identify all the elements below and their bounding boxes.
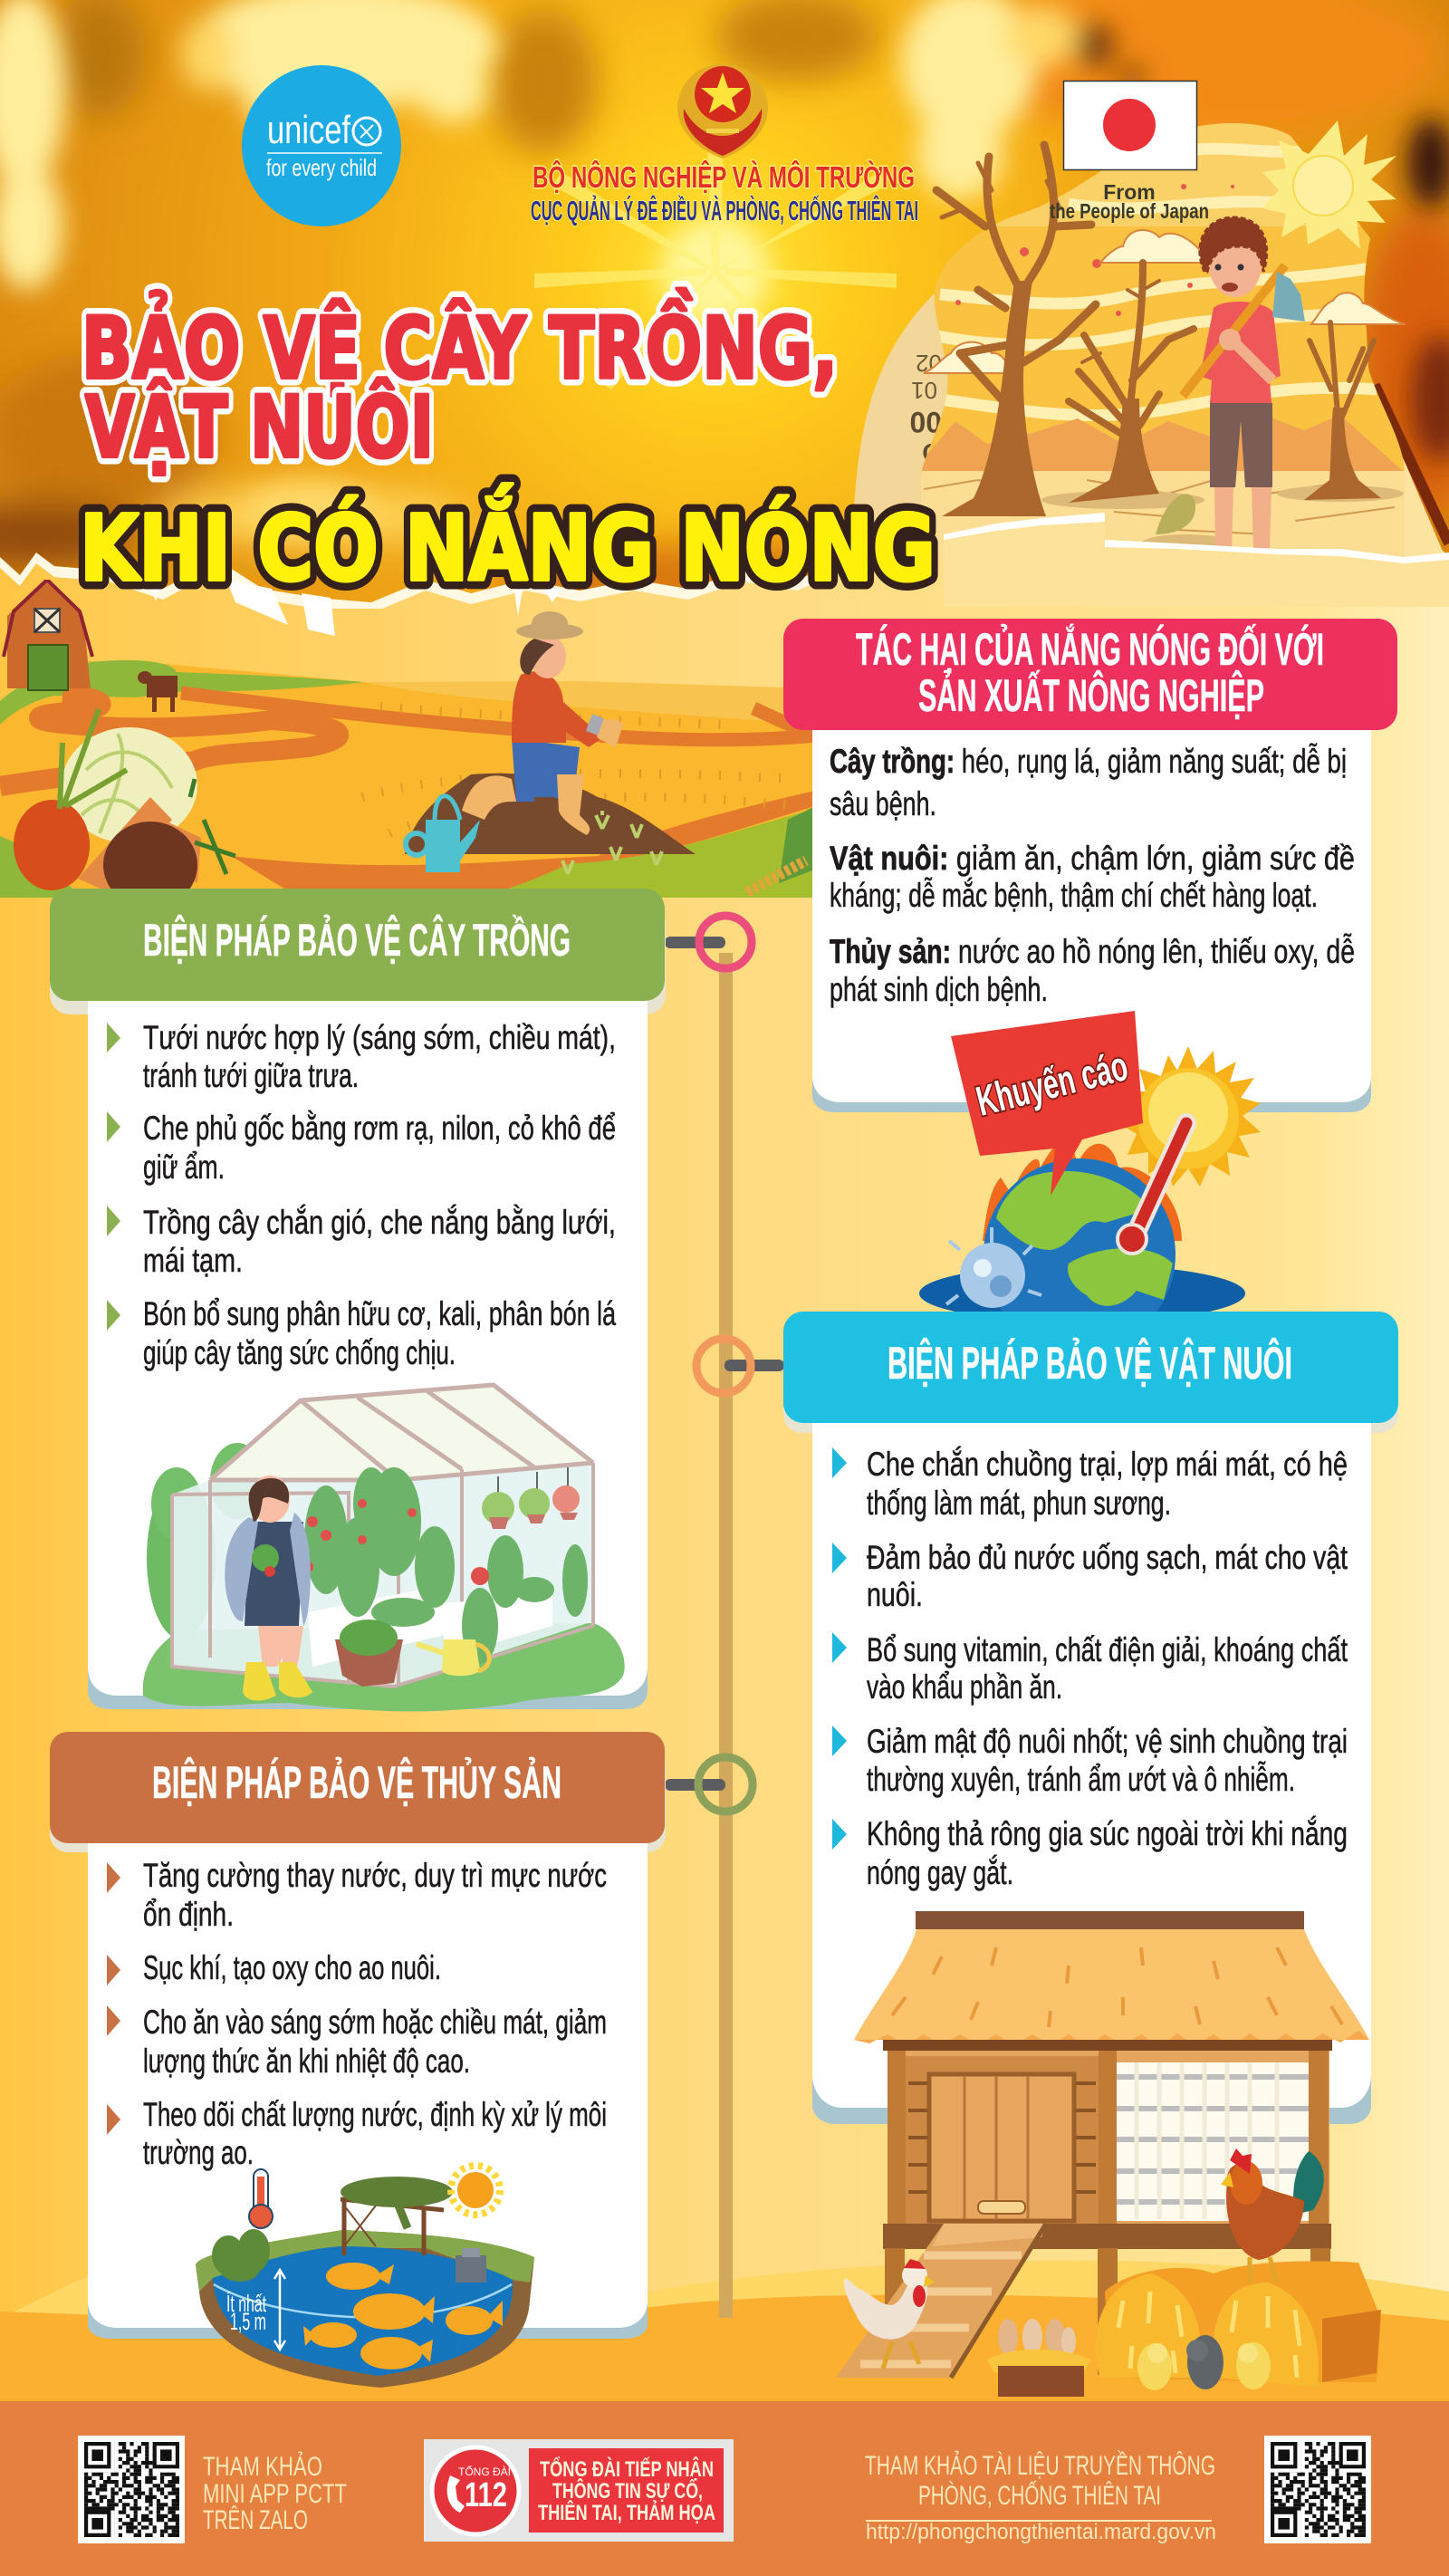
hen [844, 2259, 935, 2369]
hotline 112: THIÊN TAI, THẢM HỌA [538, 2499, 715, 2525]
QR code left [78, 2436, 185, 2543]
mini app text [203, 2451, 347, 2535]
heading [783, 619, 1397, 730]
farmer woman [462, 611, 623, 835]
barn [4, 580, 92, 690]
text list: Cho ăn vào sáng sớm hoặc chiều mát, giảm [143, 2004, 607, 2041]
text list: vào khẩu phần ăn. [867, 1668, 1062, 1706]
text list: Che phủ gốc bằng rơm rạ, nilon, cỏ khô để [143, 1110, 616, 1147]
heading [50, 1732, 665, 1843]
illustration: open book behind farmer: 00 [909, 406, 942, 438]
text list: ổn định. [143, 1896, 234, 1933]
farmer man [1183, 217, 1305, 549]
text list: giúp cây tăng sức chống chịu. [143, 1334, 456, 1371]
heading: BIỆN PHÁP BẢO VỆ CÂY TRỒNG [143, 915, 571, 966]
illustration: ground hills [0, 2260, 1449, 2409]
thermometer [1118, 1123, 1186, 1254]
bullet markers [832, 1447, 847, 1850]
chicks [1137, 2335, 1271, 2390]
sun [1118, 1046, 1261, 1187]
documents text: PHÒNG, CHỐNG THIÊN TAI [918, 2480, 1161, 2511]
text list: nóng gay gắt. [867, 1854, 1013, 1891]
ministry name: CỤC QUẢN LÝ ĐÊ ĐIỀU VÀ PHÒNG, CHỐNG THIÊN TAI [531, 194, 918, 226]
cow [138, 671, 178, 712]
text list: tránh tưới giữa trưa. [143, 1057, 359, 1094]
title: KHI CÓ NẮNG NÓNG [80, 484, 936, 601]
mini app text: TRÊN ZALO [203, 2505, 308, 2535]
illustration: chicken coop [836, 1911, 1381, 2397]
title: KHI CÓ NẮNG NÓNG [80, 484, 936, 601]
header background: fiery sky [0, 0, 1449, 616]
text list [143, 1019, 616, 1371]
pergola [341, 2177, 453, 2255]
text: phát sinh dịch bệnh. [830, 971, 1048, 1008]
heading: BIỆN PHÁP BẢO VỆ THỦY SẢN [152, 1756, 561, 1808]
torn paper edge [149, 513, 1449, 636]
warning sign [951, 1011, 1143, 1196]
logo: Vietnam national emblem [677, 63, 768, 159]
QR code right [1264, 2436, 1371, 2543]
ministry name: BỘ NÔNG NGHIỆP VÀ MÔI TRƯỜNG [533, 159, 915, 194]
documents text: THAM KHẢO TÀI LIỆU TRUYỀN THÔNG [865, 2450, 1215, 2481]
bullet markers [107, 1862, 120, 2135]
seedlings [562, 811, 662, 874]
virus [946, 1227, 1041, 1308]
hotline 112: 112 [465, 2476, 507, 2514]
wheat [747, 860, 806, 892]
logo: Japan flag: the People of Japan [1050, 199, 1209, 223]
rooster [1221, 2148, 1324, 2283]
text list: trường ao. [143, 2134, 254, 2171]
egg basket [987, 2319, 1091, 2397]
ramp [836, 2224, 1046, 2378]
text list: lượng thức ăn khi nhiệt độ cao. [143, 2043, 470, 2080]
footer band [0, 2401, 1449, 2576]
illustration: farm landscape [0, 580, 815, 908]
title: BẢO VỆ CÂY TRỒNG, [82, 286, 838, 399]
thermometer [249, 2169, 273, 2228]
ministry name [531, 159, 918, 226]
text list: giữ ẩm. [143, 1149, 225, 1186]
panel: livestock protection [783, 1312, 1398, 2124]
illustration: fish pond [196, 2166, 534, 2388]
sun [451, 2166, 500, 2215]
node: livestock [696, 1339, 784, 1393]
text list: Trồng cây chắn gió, che nắng bằng lưới, [143, 1204, 616, 1241]
text: sâu bệnh. [830, 785, 936, 822]
heading [783, 1312, 1398, 1423]
title: BẢO VỆ CÂY TRỒNG, [82, 286, 838, 399]
text list: Tưới nước hợp lý (sáng sớm, chiều mát), [143, 1019, 616, 1056]
text list: Theo dõi chất lượng nước, định kỳ xử lý môi [143, 2096, 607, 2133]
documents text: http://phongchongthientai.mard.gov.vn [866, 2520, 1216, 2544]
warning sign: Khuyến cáo [972, 1042, 1132, 1125]
watering can [406, 796, 480, 872]
pump [456, 2248, 486, 2283]
panel: crop protection [50, 889, 666, 1711]
heading [50, 889, 665, 1001]
cloud puffs [0, 0, 1449, 533]
illustration: drought farmer scene [921, 120, 1406, 557]
illustration: greenhouse [143, 1385, 625, 1711]
illustration: open book behind farmer: O [922, 438, 942, 466]
logo: Japan flag [1050, 82, 1209, 223]
sun [1262, 120, 1396, 249]
title: VẬT NUÔI [85, 377, 434, 477]
hotline 112: TỔNG ĐÀI TIẾP NHẬN [540, 2456, 714, 2482]
sun rays [534, 152, 897, 389]
node: crops [665, 916, 752, 968]
woman gardener [225, 1475, 312, 1701]
text list: thống làm mát, phun sương. [867, 1485, 1171, 1522]
text list: nuôi. [867, 1576, 923, 1613]
text list: Bón bổ sung phân hữu cơ, kali, phân bón lá [143, 1295, 616, 1332]
panel: aquaculture protection [50, 1732, 666, 2388]
illustration: fish pond: Ít nhất [226, 2290, 266, 2317]
logo: UNICEF: for every child [266, 154, 377, 181]
vegetables [14, 709, 235, 908]
text list: Tăng cường thay nước, duy trì mực nước [143, 1857, 607, 1894]
text [830, 743, 1355, 1008]
logo: UNICEF [242, 65, 401, 226]
hotline 112: THÔNG TIN SỰ CỐ, [552, 2478, 703, 2504]
text list: mái tạm. [143, 1242, 243, 1279]
hay bales [1096, 2261, 1381, 2387]
text list: Sục khí, tạo oxy cho ao nuôi. [143, 1949, 441, 1986]
text list [143, 1857, 607, 2171]
mini app text: THAM KHẢO [203, 2451, 322, 2482]
timeline [665, 916, 784, 2318]
hut frame [883, 2047, 1331, 2375]
illustration: open book behind farmer [851, 286, 1449, 589]
title: VẬT NUÔI [85, 377, 434, 477]
illustration: fish pond: 1,5 m [230, 2308, 266, 2335]
documents text [865, 2450, 1216, 2544]
clouds [924, 230, 1406, 373]
basket & can [335, 1620, 489, 1687]
illustration: open book behind farmer: 02 [916, 350, 942, 377]
dead trees [936, 145, 1381, 516]
illustration: open book behind farmer: 01 [911, 377, 937, 404]
title [80, 286, 936, 601]
hotline 112: TỔNG ĐÀI [458, 2465, 511, 2478]
panel: impacts [783, 619, 1397, 1350]
text: Vật nuôi: giảm ăn, chậm lớn, giảm sức đề [830, 840, 1355, 877]
text list [867, 1446, 1348, 1891]
node: aquaculture [665, 1757, 753, 1812]
thatched roof [854, 1911, 1369, 2051]
mini app text: MINI APP PCTT [203, 2479, 347, 2509]
bullet markers [107, 1023, 120, 1331]
logo: UNICEF: unicef [267, 108, 351, 152]
hotline 112 [424, 2439, 734, 2542]
dead plants [1156, 494, 1381, 593]
logo: Japan flag: From [1103, 180, 1156, 204]
soil mound [405, 774, 696, 854]
illustration: warning globe [919, 1140, 1245, 1350]
